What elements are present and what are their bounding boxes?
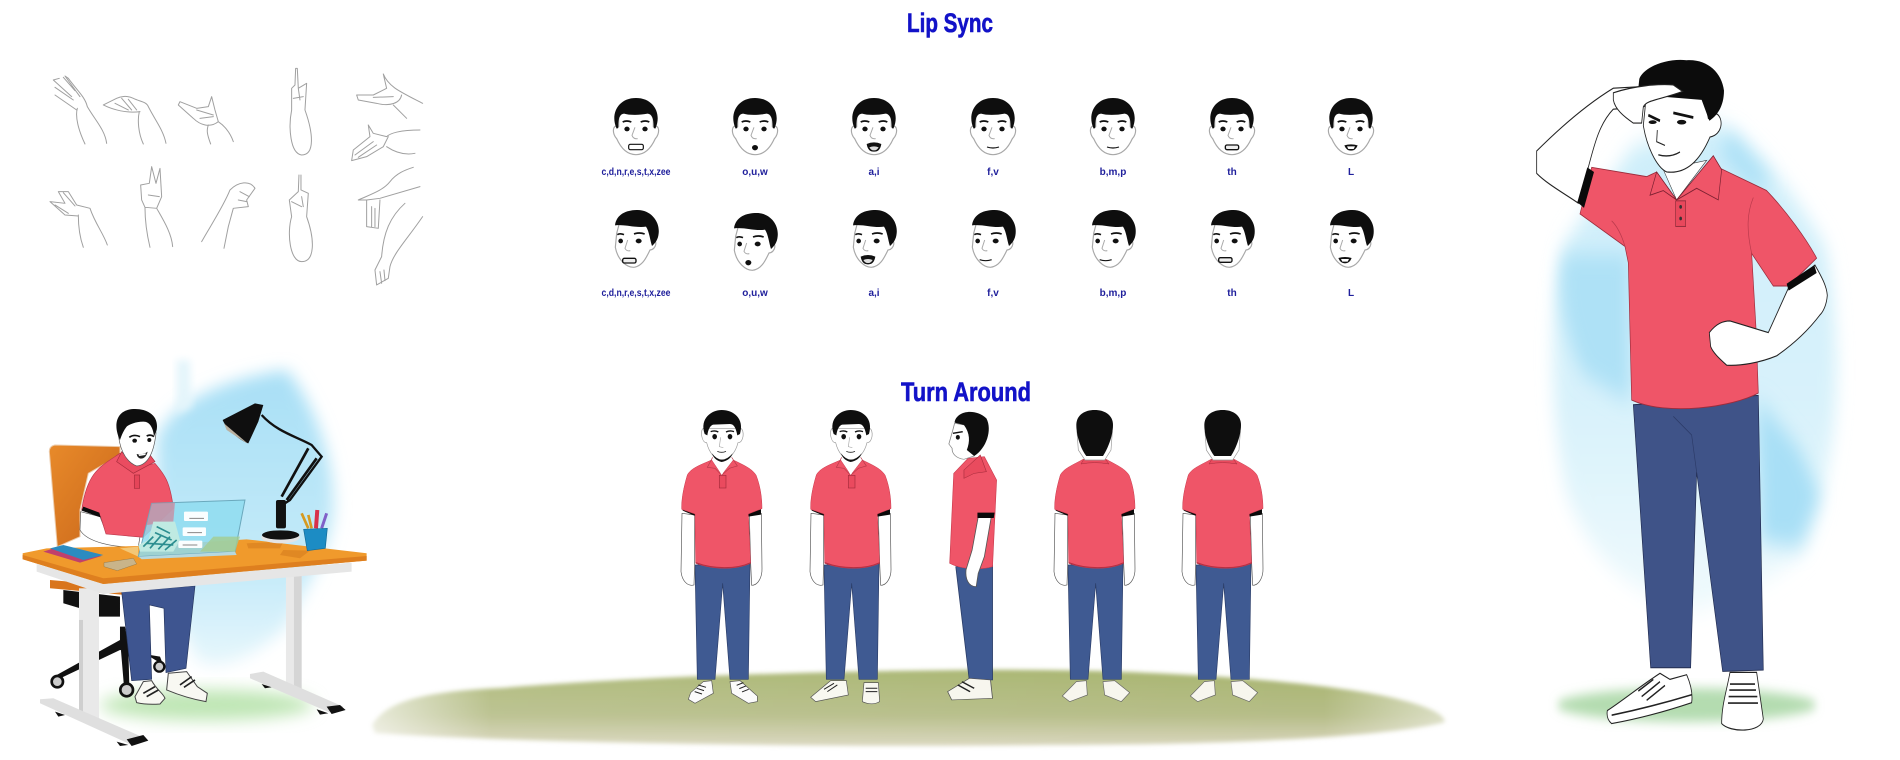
icon: desk legs: [40, 573, 346, 746]
icon: transparent laptop with keyboard hands: [138, 500, 245, 559]
raised arm: [1537, 85, 1683, 203]
icon: hanging hand: [375, 203, 423, 285]
icon: relaxed hand: [50, 192, 107, 247]
icon: two fingers raised: [141, 167, 173, 247]
labels: lip sync front row: a,i: [868, 167, 880, 178]
labels: lip sync three-quarter row: c,d,n,r,e,s,t,x,zee: [602, 288, 671, 299]
icon: face a,i: [851, 98, 897, 155]
icon: pinching hand: [202, 183, 255, 248]
labels: lip sync front row: th: [1227, 167, 1237, 178]
head: [1638, 60, 1724, 172]
panel: lip sync three-quarter row: [615, 210, 1374, 270]
heading: Turn Around: Turn Around: [901, 377, 1031, 407]
labels: lip sync front row: b,m,p: [1100, 167, 1126, 178]
icon: books: [43, 545, 138, 571]
labels: lip sync front row: L: [1348, 167, 1354, 178]
icon: office chair: [49, 445, 167, 696]
icon: face L: [1328, 98, 1374, 155]
hand on hip arm: [1709, 265, 1827, 365]
icon: pen cup: [302, 510, 327, 551]
heading: Lip Sync: Lip Sync: [907, 8, 993, 38]
panel: hand gesture sketches: [50, 68, 423, 285]
icon: three-quarter face a,i: [853, 210, 897, 267]
icon: seated man torso: [80, 409, 173, 547]
icon: pointing up arm: [290, 68, 311, 155]
labels: lip sync front row: c,d,n,r,e,s,t,x,zee: [602, 167, 671, 178]
figure: side view: [948, 412, 997, 700]
cuffs: [1577, 167, 1817, 291]
ground patch under desk: [100, 690, 313, 720]
saluting fingers: [1613, 85, 1683, 123]
icon: three-quarter face th: [1211, 210, 1255, 267]
icon: face th: [1209, 98, 1255, 155]
labels: lip sync three-quarter row: th: [1227, 288, 1237, 299]
icon: face f,v: [970, 98, 1016, 155]
ground patch: [1557, 688, 1817, 722]
labels: lip sync three-quarter row: [602, 288, 1354, 299]
figure: back three-quarter view: [1054, 410, 1135, 702]
panel: large hero figure saluting: [1537, 60, 1837, 730]
figure: three-quarter view: [810, 410, 891, 704]
icon: face o,u,w: [732, 98, 778, 155]
icon: gesturing hand: [178, 97, 233, 144]
panel: turnaround figures: [681, 410, 1263, 704]
labels: lip sync front row: [602, 167, 1354, 178]
icon: face c,d,n: [613, 98, 659, 155]
icon: seated man's legs: [122, 586, 207, 704]
icon: three-quarter face o,u,w: [734, 213, 778, 270]
figure: back view: [1182, 410, 1263, 702]
icon: palm up hand: [103, 96, 166, 144]
icon: open raised hand: [53, 76, 107, 144]
icon: three-quarter face L: [1330, 210, 1374, 267]
figure: front view: [681, 410, 762, 703]
watercolor splash behind desk: [157, 370, 334, 665]
icon: three-quarter face c,d,n: [615, 210, 659, 267]
labels: lip sync front row: f,v: [987, 167, 999, 178]
labels: lip sync three-quarter row: o,u,w: [742, 288, 768, 299]
icon: drooping hand: [358, 167, 420, 228]
labels: lip sync front row: o,u,w: [742, 167, 768, 178]
panel: lip sync front row: [613, 98, 1374, 155]
icon: face b,m,p: [1090, 98, 1136, 155]
icon: reaching hand: [352, 125, 420, 161]
icon: three-quarter face b,m,p: [1092, 210, 1136, 267]
pants: [1633, 395, 1763, 671]
labels: lip sync three-quarter row: a,i: [868, 288, 880, 299]
shirt: [1580, 156, 1817, 409]
icon: desk lamp: [223, 403, 322, 543]
labels: lip sync three-quarter row: b,m,p: [1100, 288, 1126, 299]
icon: three-quarter face f,v: [972, 210, 1016, 267]
panel: desk scene: [23, 360, 367, 746]
watercolor splash behind hero: [1553, 123, 1837, 612]
ground patch under turnaround: [360, 665, 1455, 750]
icon: pointing up arm two: [289, 175, 312, 262]
labels: lip sync three-quarter row: L: [1348, 288, 1354, 299]
icon: desk top: [23, 539, 367, 594]
shoes: [1607, 672, 1763, 730]
labels: lip sync three-quarter row: f,v: [987, 288, 999, 299]
icon: open hand to left: [357, 74, 423, 118]
